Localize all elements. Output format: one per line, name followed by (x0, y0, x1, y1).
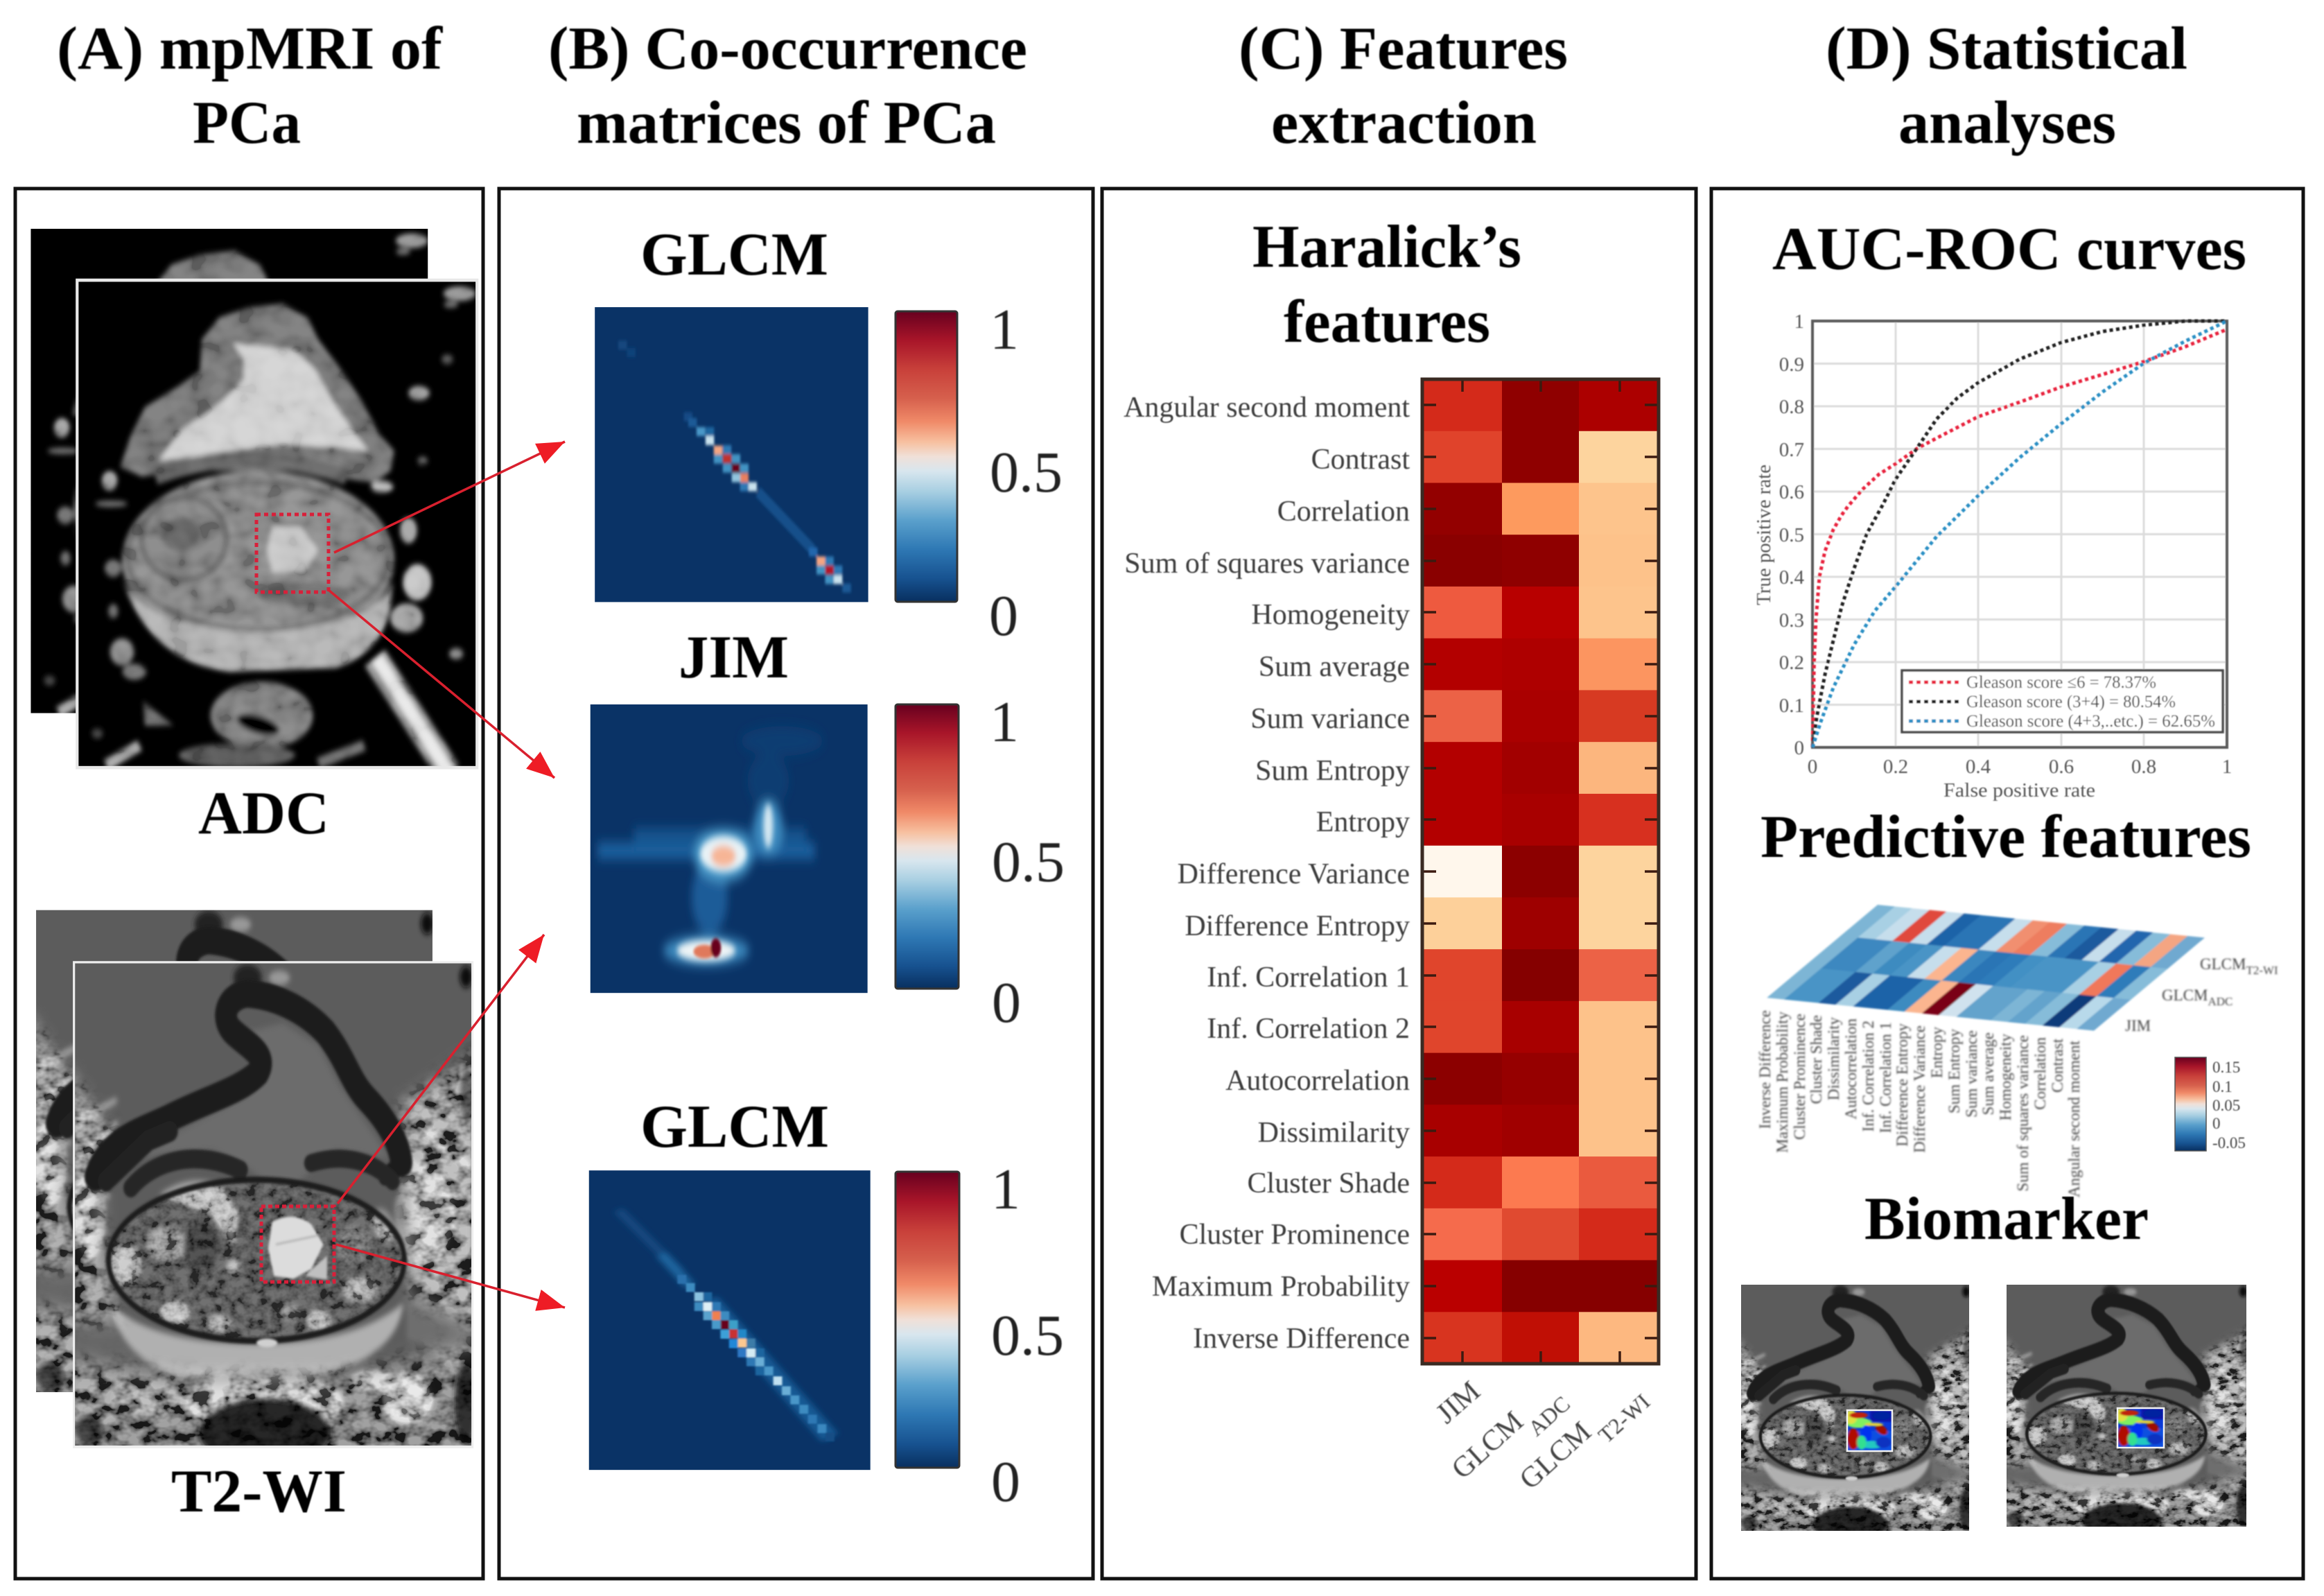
row labels: Haralick features: Sum variance (1250, 703, 1410, 735)
title: (D) Statistical analyses (1826, 15, 2187, 157)
colorbar labels: bottom (991, 1157, 1064, 1514)
chart: predictive features 3D heatmap: Sum of squares variance (2014, 1035, 2032, 1191)
title: (A) mpMRI of PCa (57, 15, 444, 157)
title: (B) Co-occurrence matrices of PCa: (B) Co-occurrence (548, 15, 1027, 83)
chart: ROC curves: 0.4 (1966, 756, 1991, 778)
ROI box on ADC (256, 514, 329, 592)
chart: predictive features 3D heatmap: Difference Entropy (1894, 1023, 1911, 1147)
row labels: Haralick features: Sum average (1259, 651, 1410, 683)
row labels: Haralick features: Entropy (1316, 806, 1410, 838)
colorbar: middle (895, 704, 959, 989)
image: T2-WI front slice (71, 961, 478, 1467)
title: (D) Statistical analyses: (D) Statistical (1826, 15, 2187, 83)
chart: ROC curves: 0 (1794, 737, 1804, 759)
chart: ROC curves: 0.4 (1779, 566, 1805, 589)
chart: predictive features 3D heatmap: Sum Entropy (1946, 1029, 1963, 1113)
chart: predictive features 3D heatmap: Inf. Correlation 1 (1877, 1022, 1894, 1133)
arrow: T2-WI ROI to JIM (338, 935, 544, 1204)
column labels: Haralick matrix: GLCM (1514, 1416, 1598, 1495)
image: biomarker overlay left (1738, 1285, 1973, 1542)
colorbar labels: top: 0.5 (990, 440, 1063, 505)
chart: ROC curves: Gleason score (4+3,..etc.) = 62.65% (1966, 712, 2215, 731)
title: (A) mpMRI of PCa: PCa (193, 89, 301, 157)
image: biomarker overlay right (2004, 1285, 2250, 1538)
chart: ROC curves: Gleason score (3+4) = 80.54% (1966, 693, 2176, 711)
row labels: Haralick features: Homogeneity (1251, 599, 1410, 631)
row labels: Haralick features: Dissimilarity (1258, 1117, 1410, 1149)
chart: ROC curves: 0.9 (1779, 354, 1804, 376)
column labels: Haralick matrix: ADC (1523, 1391, 1575, 1441)
chart: ROC curves: 1 (2222, 756, 2232, 778)
colorbar labels: middle: 0.5 (992, 830, 1065, 894)
chart: ROC curves: 0 (1808, 756, 1817, 778)
row labels: Haralick features: Correlation (1277, 496, 1410, 528)
colorbar labels: middle (990, 690, 1065, 1035)
title: (D) Statistical analyses: analyses (1898, 89, 2116, 157)
chart: ROC curves: 0.3 (1779, 609, 1804, 632)
colorbar: bottom (895, 1172, 959, 1468)
heading: GLCM bottom: GLCM (640, 1093, 829, 1161)
colorbar labels: top: 1 (990, 297, 1019, 362)
colorbar: predictive features (2175, 1057, 2246, 1152)
chart: predictive features 3D heatmap: Correlation (2032, 1037, 2049, 1110)
heading: Haralick's features: Haralick’s (1252, 214, 1521, 281)
chart: ROC curves: 0.1 (1779, 695, 1804, 717)
heatmap: Haralick feature matrix (1422, 379, 1659, 1364)
colorbar: predictive features: 0.1 (2212, 1078, 2233, 1095)
colorbar labels: bottom: 1 (991, 1157, 1020, 1222)
colorbar labels: middle: 1 (990, 690, 1019, 754)
panel: A mpMRI frame (15, 189, 483, 1579)
arrow: ADC ROI to top GLCM (334, 442, 565, 553)
colorbar labels: middle: 0 (992, 971, 1021, 1035)
column labels: Haralick matrix (1430, 1375, 1654, 1495)
chart: predictive features 3D heatmap: Cluster Prominence (1791, 1014, 1808, 1140)
row labels: Haralick features: Angular second moment (1124, 392, 1410, 424)
chart: predictive features 3D heatmap (1756, 905, 2278, 1197)
chart: predictive features 3D heatmap: Angular second moment (2065, 1040, 2083, 1197)
chart: ROC curves: 0.5 (1779, 524, 1804, 546)
chart: ROC curves: 0.8 (2131, 756, 2156, 778)
column labels: Haralick matrix: T2-WI (1593, 1389, 1654, 1448)
chart: predictive features 3D heatmap: Sum variance (1963, 1030, 1980, 1118)
panel: D statistics frame (1711, 189, 2303, 1579)
row labels: Haralick features: Maximum Probability (1152, 1271, 1410, 1303)
heading: AUC-ROC curves: AUC-ROC curves (1772, 216, 2246, 283)
chart: ROC curves: 0.7 (1779, 439, 1804, 461)
chart: predictive features 3D heatmap: GLCM (2200, 955, 2246, 973)
chart: ROC curves: 0.8 (1779, 396, 1804, 418)
column labels: Haralick matrix: GLCM (1446, 1405, 1530, 1485)
row labels: Haralick features: Contrast (1311, 444, 1410, 476)
panel: C features frame (1102, 189, 1696, 1579)
chart: predictive features 3D heatmap: Sum average (1980, 1032, 1997, 1115)
label: T2-WI: T2-WI (171, 1458, 347, 1525)
row labels: Haralick features: Cluster Shade (1248, 1168, 1410, 1199)
colorbar: predictive features: 0.15 (2212, 1059, 2240, 1076)
row labels: Haralick features: Autocorrelation (1225, 1065, 1410, 1097)
colorbar labels: top (989, 297, 1063, 648)
row labels: Haralick features: Difference Variance (1178, 858, 1410, 890)
row labels: Haralick features: Sum Entropy (1255, 755, 1410, 787)
heading: Haralick's features (1252, 214, 1521, 356)
chart: predictive features 3D heatmap: Entropy (1928, 1027, 1946, 1078)
chart: predictive features 3D heatmap: Difference Variance (1911, 1025, 1928, 1153)
chart: ROC curves: 0.6 (2049, 756, 2074, 778)
title: (A) mpMRI of PCa: (A) mpMRI of (57, 15, 444, 83)
row labels: Haralick features: Inverse Difference (1193, 1323, 1410, 1355)
image: ADC back slice (30, 229, 428, 720)
title: (B) Co-occurrence matrices of PCa: matrices of PCa (577, 89, 996, 157)
row labels: Haralick features: Sum of squares variance (1124, 548, 1410, 580)
colorbar: predictive features: 0 (2212, 1115, 2221, 1132)
heatmap: GLCM of ADC (595, 307, 868, 602)
chart: ROC curves: 0.2 (1883, 756, 1908, 778)
chart: ROC curves: True positive rate (1753, 465, 1775, 605)
image: T2-WI back slice (32, 910, 439, 1414)
image: ADC front slice (76, 279, 478, 773)
chart: predictive features 3D heatmap: Autocorrelation (1842, 1018, 1860, 1120)
chart: predictive features 3D heatmap: Inverse Difference (1756, 1010, 1774, 1129)
chart: ROC curves: Gleason score ≤6 = 78.37% (1966, 673, 2156, 692)
heading: GLCM top: GLCM (640, 221, 828, 288)
colorbar: top (895, 311, 957, 602)
chart: predictive features 3D heatmap: GLCM (2162, 987, 2208, 1004)
chart: predictive features 3D heatmap: Homogeneity (1997, 1034, 2014, 1120)
chart: ROC curves: 0.6 (1779, 481, 1804, 503)
title: (B) Co-occurrence matrices of PCa (548, 15, 1027, 157)
chart: predictive features 3D heatmap: Cluster Shade (1808, 1015, 1825, 1104)
colorbar labels: bottom: 0.5 (991, 1303, 1064, 1368)
colorbar: predictive features: 0.05 (2212, 1097, 2240, 1114)
chart: ROC curves (1753, 311, 2232, 801)
row labels: Haralick features (1124, 392, 1410, 1355)
heading: JIM: JIM (679, 624, 789, 691)
heading: Predictive features: Predictive features (1761, 804, 2251, 871)
arrow: ADC ROI to JIM (329, 590, 554, 778)
chart: predictive features 3D heatmap: ADC (2208, 995, 2233, 1008)
heading: Haralick's features: features (1284, 288, 1490, 356)
chart: predictive features 3D heatmap: JIM (2125, 1017, 2151, 1034)
label: ADC: ADC (198, 780, 329, 847)
title: (C) Features extraction (1239, 15, 1568, 157)
ROI box on T2-WI (261, 1206, 334, 1282)
panel: B co-occurrence frame (499, 189, 1093, 1579)
arrow: T2-WI ROI to bottom GLCM (336, 1244, 565, 1308)
colorbar labels: top: 0 (989, 584, 1018, 648)
chart: predictive features 3D heatmap: Dissimilarity (1825, 1017, 1842, 1100)
row labels: Haralick features: Inf. Correlation 1 (1207, 962, 1410, 994)
heading: Biomarker: Biomarker (1864, 1186, 2149, 1253)
row labels: Haralick features: Inf. Correlation 2 (1207, 1013, 1410, 1045)
chart: predictive features 3D heatmap: T2-WI (2246, 964, 2278, 977)
chart: ROC curves: 1 (1794, 311, 1804, 333)
heatmap: GLCM of T2-WI (589, 1170, 871, 1470)
row labels: Haralick features: Cluster Prominence (1180, 1219, 1410, 1251)
title: (C) Features extraction: extraction (1271, 89, 1537, 157)
row labels: Haralick features: Difference Entropy (1185, 910, 1410, 942)
chart: predictive features 3D heatmap: Contrast (2049, 1038, 2066, 1093)
chart: ROC curves: False positive rate (1943, 779, 2095, 801)
colorbar labels: bottom: 0 (991, 1450, 1020, 1514)
chart: ROC curves: 0.2 (1779, 652, 1804, 674)
chart: predictive features 3D heatmap: Maximum Probability (1774, 1012, 1791, 1153)
title: (C) Features extraction: (C) Features (1239, 15, 1568, 83)
column labels: Haralick matrix: JIM (1430, 1375, 1487, 1430)
colorbar: predictive features: -0.05 (2212, 1134, 2246, 1152)
heatmap: JIM (591, 704, 868, 993)
chart: predictive features 3D heatmap: Inf. Correlation 2 (1860, 1021, 1877, 1131)
